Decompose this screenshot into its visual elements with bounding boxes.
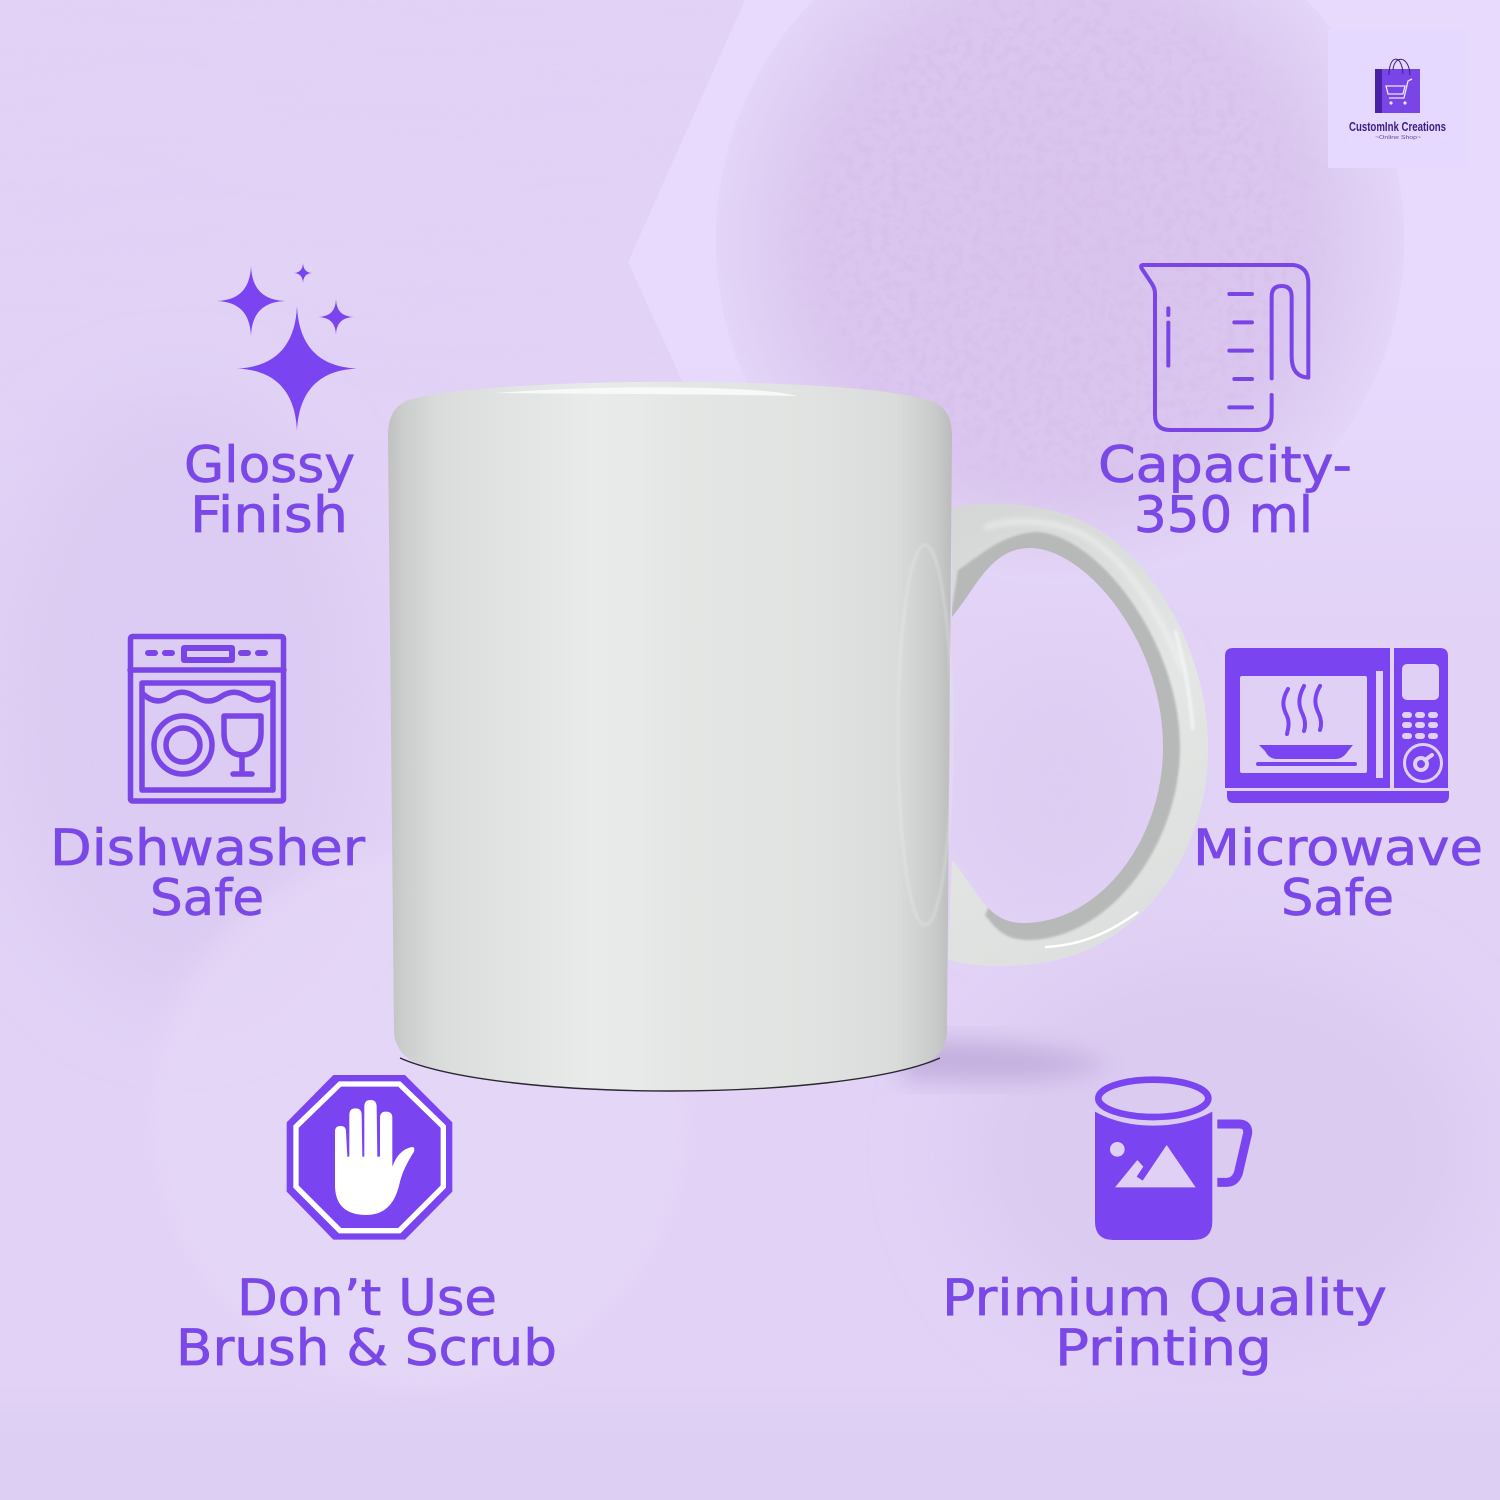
- handle attachment oval: [898, 545, 952, 925]
- label: microwave safe: [1193, 819, 1483, 927]
- label: capacity: Capacity-: [1098, 436, 1352, 494]
- label: premium quality printing: Printing: [1055, 1319, 1272, 1377]
- label: dishwasher safe: Dishwasher: [50, 819, 365, 877]
- mug shadow: [900, 1039, 1115, 1082]
- label: don't use brush and scrub: Don’t Use: [237, 1269, 497, 1327]
- mug bottom edge: [400, 1058, 940, 1091]
- background: blurred coffee photo: [628, 0, 1500, 508]
- logo name: CustomInk Creations: [1349, 120, 1446, 134]
- label: dishwasher safe: Safe: [150, 869, 264, 927]
- feature: dishwasher safe: [50, 636, 365, 927]
- label: microwave safe: Safe: [1281, 869, 1394, 927]
- feature: don't use brush and scrub: [176, 1075, 557, 1377]
- label: glossy finish: [184, 436, 355, 544]
- logo panel: [1328, 29, 1467, 168]
- icon: printed mug: [1095, 1080, 1248, 1240]
- label: capacity: [1098, 436, 1352, 544]
- white mug: [388, 382, 1208, 1092]
- mug rim highlight: [495, 387, 797, 396]
- mug handle: [948, 504, 1208, 966]
- mug body: [388, 382, 952, 1092]
- icon: stop hand: [287, 1075, 452, 1240]
- label: don't use brush and scrub: [176, 1269, 557, 1377]
- feature: premium quality printing: [942, 1080, 1387, 1377]
- label: capacity: 350 ml: [1134, 486, 1313, 544]
- label: don't use brush and scrub: Brush & Scrub: [176, 1319, 557, 1377]
- label: premium quality printing: Primium Quality: [942, 1269, 1387, 1327]
- icon: dishwasher: [130, 636, 284, 801]
- label: microwave safe: Microwave: [1193, 819, 1483, 877]
- feature: microwave safe: [1193, 648, 1483, 927]
- feature: capacity: [1098, 265, 1352, 544]
- icon: sparkles: [217, 263, 357, 431]
- label: dishwasher safe: [50, 819, 365, 927]
- logo tagline: ~Online Shop~: [1375, 135, 1421, 141]
- label: glossy finish: Finish: [190, 486, 348, 544]
- icon: shopping bag with cart: [1375, 59, 1420, 113]
- label: premium quality printing: [942, 1269, 1387, 1377]
- icon: microwave: [1225, 648, 1449, 803]
- icon: measuring jug: [1141, 265, 1308, 430]
- feature: glossy finish: [184, 263, 357, 544]
- label: glossy finish: Glossy: [184, 436, 355, 494]
